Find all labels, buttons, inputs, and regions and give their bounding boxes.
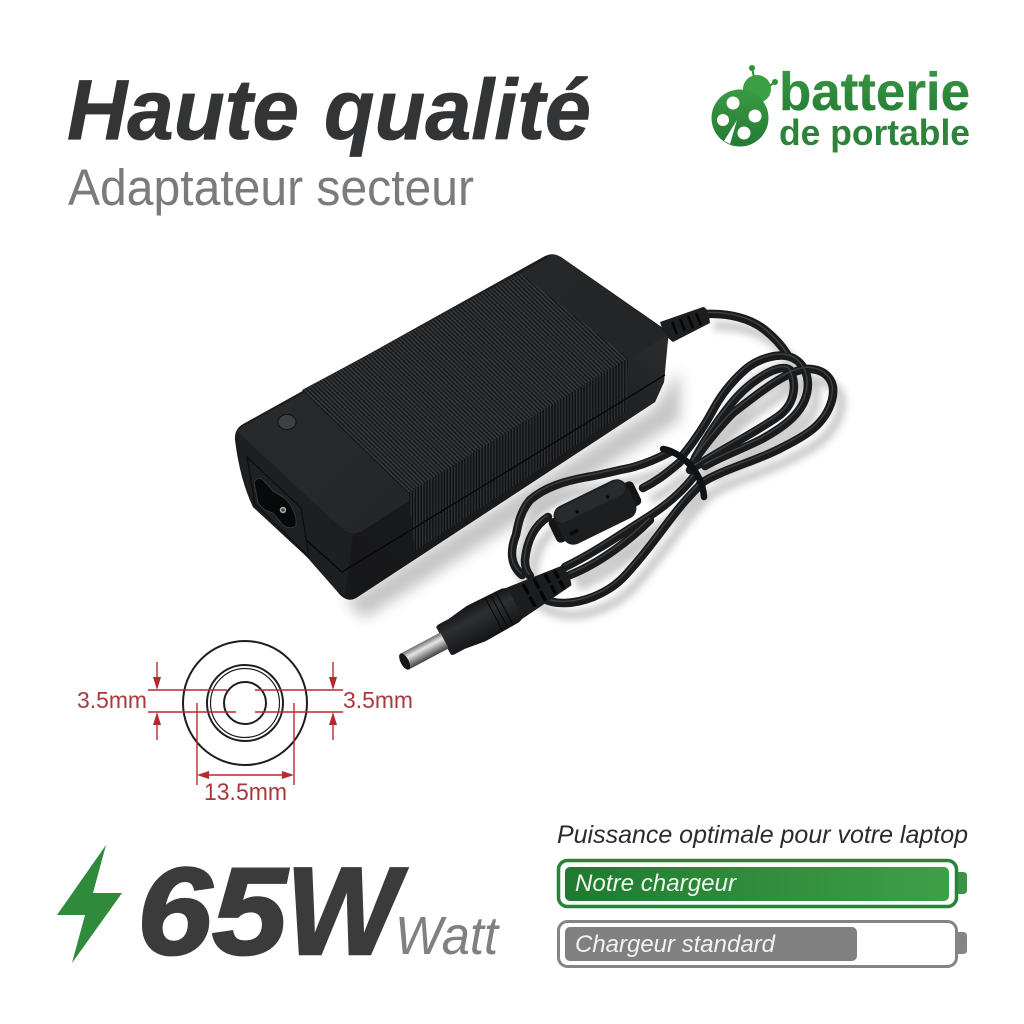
strain relief bbox=[501, 559, 577, 622]
logo: batterie de portable bbox=[712, 62, 970, 153]
adapter shadow bbox=[345, 370, 680, 618]
cable highlights bbox=[511, 312, 832, 601]
battery bar: our charger bbox=[558, 860, 967, 906]
title: Haute bbox=[67, 63, 299, 158]
label: left 3.5mm: 3.5mm bbox=[77, 687, 147, 713]
power socket bbox=[247, 457, 309, 557]
label: right 3.5mm: 3.5mm bbox=[343, 687, 413, 713]
title: qualité bbox=[324, 63, 591, 158]
battery bar: standard charger bbox=[558, 922, 967, 966]
dimension lines bbox=[148, 662, 343, 785]
power rating: 65W bbox=[137, 843, 408, 981]
cable tie bbox=[663, 449, 704, 497]
heat sink ribs: top bbox=[302, 273, 628, 493]
barrel bbox=[434, 585, 524, 659]
icon: lightning bolt bbox=[57, 845, 122, 963]
power rating: 65W: 65 bbox=[137, 843, 289, 981]
label: 13.5mm: 13.5mm bbox=[204, 779, 287, 806]
shell seam bbox=[303, 375, 665, 572]
comparison heading: Puissance optimale pour votre laptop bbox=[557, 821, 968, 849]
metal pin bbox=[400, 633, 449, 670]
ferrite core bbox=[544, 473, 646, 551]
bar label: Chargeur standard bbox=[575, 931, 776, 958]
heat sink ribs: side bbox=[408, 358, 628, 551]
dimension arrowheads bbox=[153, 677, 337, 779]
connector dimension diagram bbox=[77, 641, 413, 806]
adapter body bbox=[235, 254, 668, 600]
cable shadow bbox=[520, 326, 841, 615]
logo text: batterie: batterie bbox=[779, 62, 970, 122]
unit: Watt: Watt bbox=[395, 906, 500, 966]
logo text: de portable: de portable bbox=[779, 112, 970, 153]
DC plug connector bbox=[392, 557, 578, 681]
power cable bbox=[512, 314, 833, 603]
connector circles bbox=[183, 641, 307, 765]
product photo: power adapter bbox=[235, 254, 841, 681]
icon: ladybug bbox=[712, 65, 778, 146]
subtitle: Adaptateur secteur bbox=[68, 159, 474, 216]
title bbox=[67, 63, 591, 158]
strain relief at adapter bbox=[660, 307, 710, 342]
status LED bbox=[278, 414, 296, 430]
bar label: Notre chargeur bbox=[575, 870, 737, 897]
power rating: 65W: W bbox=[286, 843, 408, 981]
